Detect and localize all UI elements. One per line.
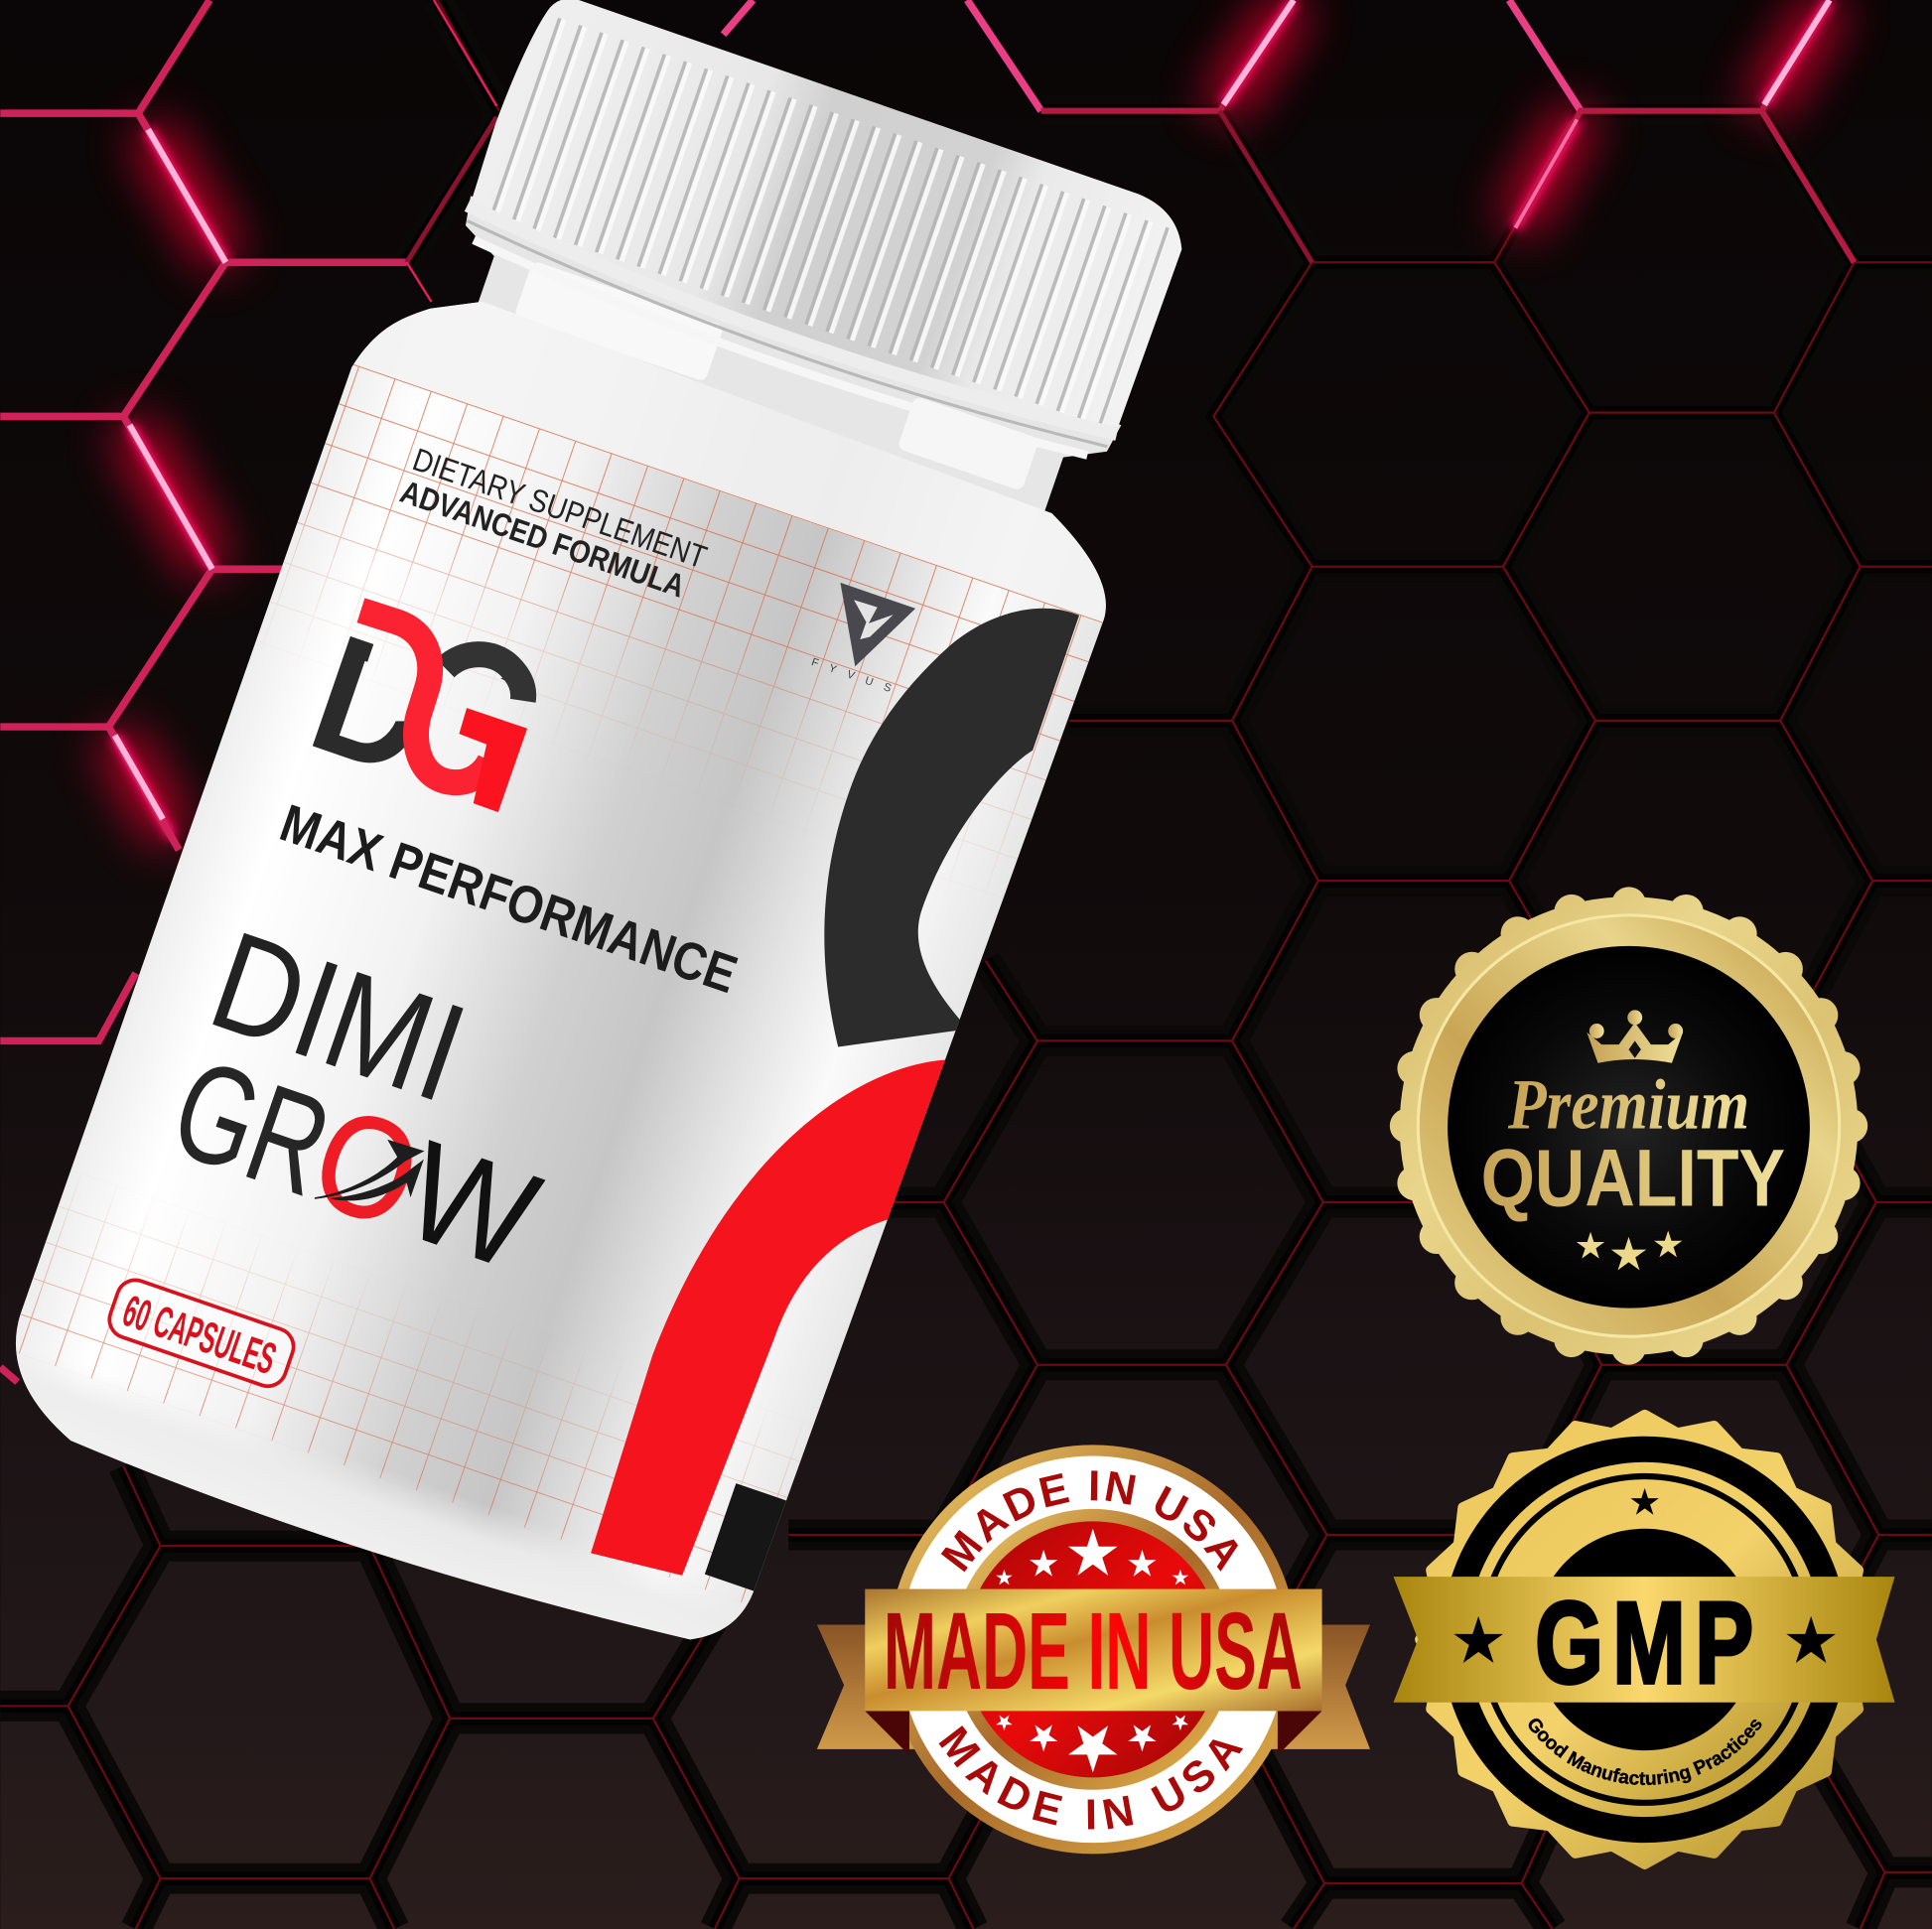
badge: premium quality [1400,896,1858,1355]
bottle body [0,267,1136,1679]
badge: gmp [1394,1410,1894,1869]
text: w: W [387,1111,556,1300]
ribbon [1394,1577,1895,1703]
shoulder shading [353,302,1106,623]
logo: DG: G [410,620,618,874]
ribbon folds [865,1711,1322,1755]
product bottle [16,0,1181,1640]
icon: white stars [996,1529,1188,1772]
text: dimi: DIMI [194,900,483,1132]
icon: stars [1577,1231,1682,1270]
text: curved top: MADE IN USA [941,1470,1238,1573]
screw cap [452,0,1194,476]
text: quality: QUALITY [1481,1134,1785,1224]
label grid bottom [16,1179,801,1604]
icon: top star [1630,1488,1659,1515]
black arc graphic [824,608,1079,1046]
text: advanced formula: ADVANCED FORMULA [396,474,689,605]
text: premium: Premium [1507,1065,1749,1145]
text: gmp: GMP [1535,1578,1762,1708]
glowing pink honeycomb lines [0,0,1855,1382]
icon: grow arrow [315,1140,425,1200]
badge: 60 capsules: 60 CAPSULES [117,1287,282,1384]
scalloped seal [1421,1416,1868,1863]
text: good manufacturing practices: Good Manufacturing Practices [1529,1718,1761,1785]
bottle neck [431,196,1123,535]
icon: crown [1587,1010,1683,1063]
black block [705,1483,786,1590]
text: red o: O [295,1077,438,1259]
bottle base band [16,1346,749,1640]
main ribbon [865,1589,1322,1711]
text: fyvus: FYVUS [810,656,893,695]
logo: fyvus mark [840,583,915,666]
label grid top [266,364,1103,884]
red arc graphic [591,1060,945,1576]
logo: DG: D [291,600,456,813]
text: dietary supplement: DIETARY SUPPLEMENT [408,441,711,575]
badge: made in usa [816,1445,1370,1855]
label art [0,261,1153,1700]
text: gr: GR [155,1029,348,1225]
text: max performance: MAX PERFORMANCE [273,794,744,1005]
ribbon tails [817,1625,1370,1749]
logo: DG [312,598,536,812]
badge: 60 capsules [104,1275,299,1391]
text: curved bottom: MADE IN USA [939,1725,1243,1829]
text: made in usa: MADE IN USA [884,1590,1303,1713]
icon: ribbon stars [1453,1616,1836,1663]
